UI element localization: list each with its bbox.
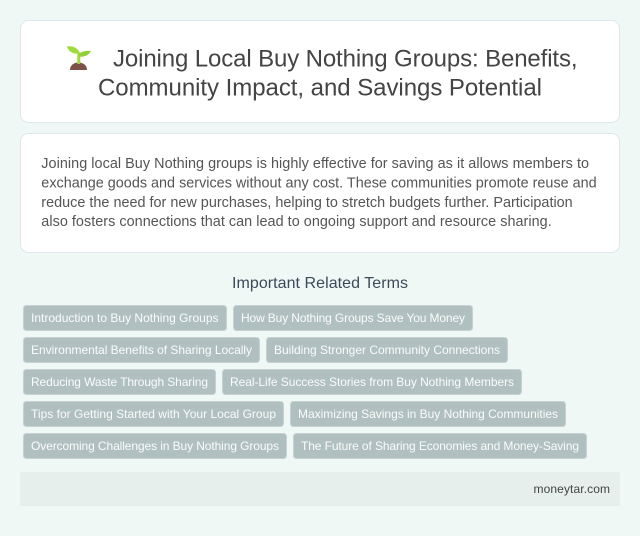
panel: description: [20, 134, 620, 252]
chip: maximizing savings: [290, 402, 566, 426]
chip: save money: How Buy Nothing Groups Save You Money: [241, 311, 465, 325]
title: [98, 46, 578, 102]
title: Community Impact, and Savings Potential: [98, 74, 542, 102]
chip: success stories: [222, 370, 522, 394]
chip: getting started: Tips for Getting Started with Your Local Group: [31, 407, 276, 421]
chip: overcoming challenges: Overcoming Challenges in Buy Nothing Groups: [31, 439, 279, 453]
chip: community connections: [266, 338, 508, 362]
chip: environmental benefits: Environmental Benefits of Sharing Locally: [31, 343, 252, 357]
chip: success stories: Real-Life Success Stories from Buy Nothing Members: [230, 375, 514, 389]
chip: introduction: [24, 306, 226, 330]
footer text: source: moneytar.com: [534, 482, 610, 496]
text block: description: exchange goods and services without any cost. These communities promote reuse and: [41, 176, 597, 192]
chip: introduction: Introduction to Buy Nothing Groups: [31, 311, 218, 325]
chip: save money: [234, 306, 472, 330]
chip: community connections: Building Stronger Community Connections: [274, 343, 500, 357]
chip: future of sharing: The Future of Sharing Economies and Money-Saving: [301, 439, 579, 453]
chip: reducing waste: [24, 370, 216, 394]
heading: related terms: Important Related Terms: [232, 275, 408, 292]
title: Joining Local Buy Nothing Groups: Benefits,: [113, 46, 578, 72]
chip: getting started: [24, 402, 284, 426]
text block: description: Joining local Buy Nothing groups is highly effective for saving as it allows members to: [41, 156, 589, 172]
chip: environmental benefits: [24, 338, 260, 362]
panel: related term chips: [24, 306, 586, 458]
text block: description: also fosters connections that can lead to ongoing support and resource sharing.: [41, 214, 552, 230]
icon: sprout: [67, 46, 91, 70]
chip: overcoming challenges: [24, 434, 286, 458]
chip: reducing waste: Reducing Waste Through Sharing: [31, 375, 208, 389]
footer: [20, 472, 620, 506]
text block: description: reduce the need for new purchases, helping to stretch budgets further. Participation: [41, 195, 573, 211]
text block: description: [41, 156, 597, 230]
chip: maximizing savings: Maximizing Savings in Buy Nothing Communities: [298, 407, 558, 421]
panel: title card: [20, 20, 620, 122]
chip: future of sharing: [294, 434, 586, 458]
